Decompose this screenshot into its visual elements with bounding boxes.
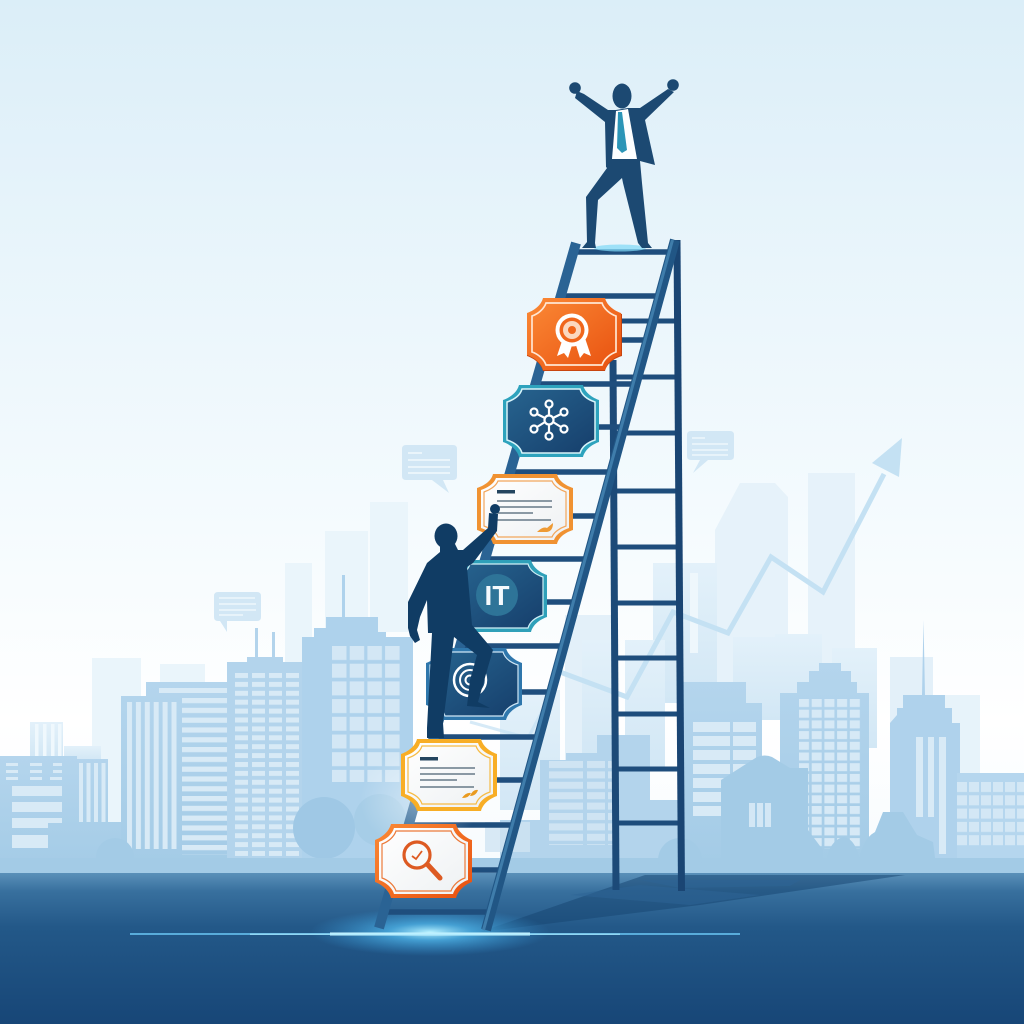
badge: navy target [426, 648, 522, 720]
ground glow [130, 908, 740, 956]
skyline: centre blocks behind ladder [485, 735, 690, 873]
badge halos [360, 750, 480, 850]
skyline: right city blocks [683, 620, 1024, 873]
icon: concentric target [454, 664, 486, 696]
ground [0, 873, 1024, 1024]
icon: document lines and leaf seal [420, 757, 478, 798]
badge: orange award [527, 298, 622, 371]
badge: certificate yellow border [401, 739, 497, 811]
icon: magnifying glass with check [404, 842, 440, 878]
icon: network nodes [530, 400, 568, 440]
ladder: front frame [379, 240, 675, 930]
chart: rising trend arrow [470, 438, 902, 738]
person: climbing the ladder [408, 504, 500, 738]
badge: certificate orange border [477, 474, 573, 544]
ground bright line [250, 934, 620, 935]
far skyline [92, 473, 980, 868]
skyline: left city blocks [0, 575, 413, 875]
badge: magnifier check [375, 824, 472, 898]
speech bubble: right [687, 431, 734, 473]
speech bubble: centre [402, 445, 457, 493]
ladder: back frame [612, 240, 682, 891]
badge: IT teal [451, 560, 547, 632]
person: celebrating at top of ladder [569, 79, 679, 252]
skyline: foreground house, trees and bushes [0, 756, 1024, 882]
icon: IT circle: IT [485, 580, 509, 611]
speech bubble: left [214, 592, 261, 632]
mid skyline [30, 563, 877, 810]
ladder shadow on ground [480, 875, 905, 932]
icon: rosette award [556, 314, 591, 358]
icon: document lines and seal [497, 490, 553, 532]
badge: navy network [503, 385, 599, 457]
